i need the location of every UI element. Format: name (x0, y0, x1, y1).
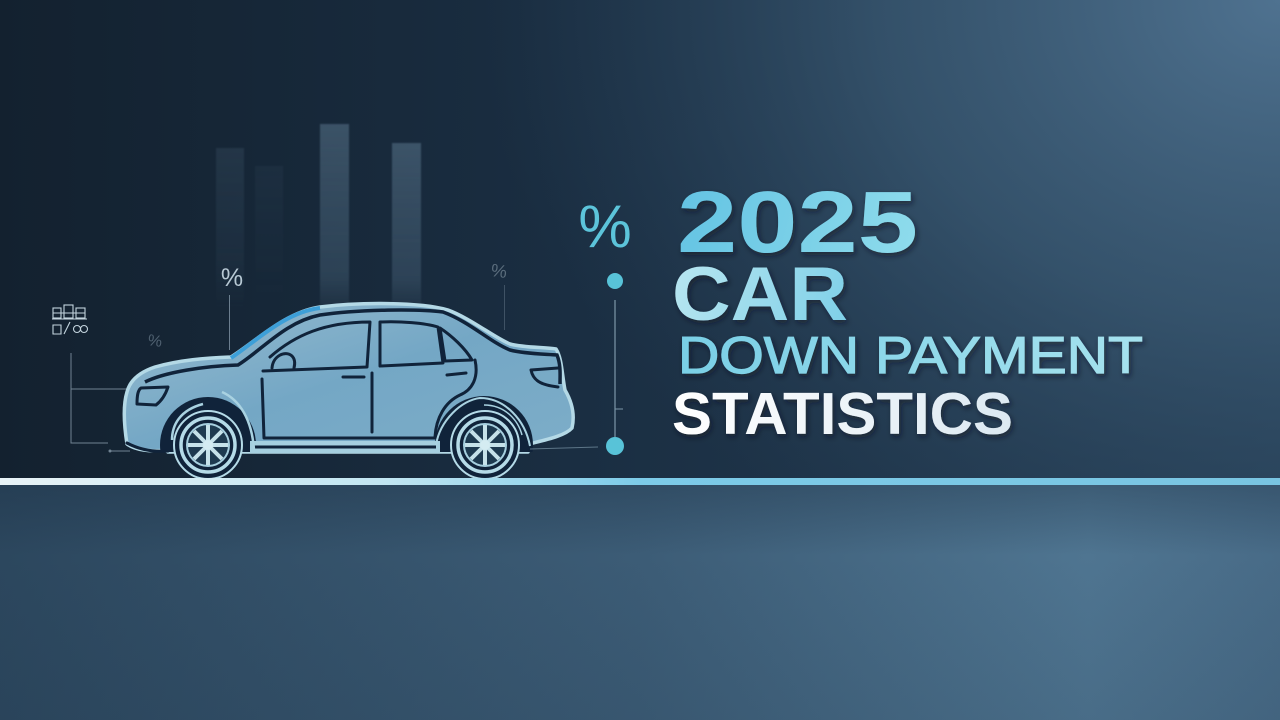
wheel arches dark (160, 396, 533, 452)
title (672, 174, 1143, 447)
icon: faint percent marker: % (147, 332, 163, 351)
wheel arch trims (172, 392, 530, 450)
icon: large percent sign: % (578, 193, 632, 260)
lower floor panel (0, 484, 1280, 720)
annotation: left bracket lines (71, 353, 130, 452)
road line (0, 478, 1280, 485)
annotation: right connector with dots (530, 273, 624, 455)
title line: STATISTICS: STATISTICS (672, 381, 1013, 447)
background bar chart (216, 124, 421, 314)
car body (124, 304, 573, 452)
title line: DOWN PAYMENT: DOWN PAYMENT (678, 327, 1143, 385)
title line: CAR: CAR (672, 252, 848, 337)
background upper panel (0, 0, 1280, 480)
car illustration (124, 304, 573, 494)
upper body contour line (145, 310, 560, 384)
sill band (250, 438, 440, 453)
icon: faint percent marker right (490, 260, 508, 330)
windshield highlight (231, 308, 320, 358)
door and window lines (127, 322, 558, 451)
icon: percent marker left: % (221, 264, 243, 292)
icon: small calculator glyphs (52, 305, 88, 334)
title line: 2025: 2025 (677, 174, 918, 271)
rear wheel (451, 411, 519, 479)
icon: percent marker left (221, 264, 243, 350)
front wheel (174, 411, 242, 479)
icon: faint percent marker right: % (490, 260, 508, 282)
